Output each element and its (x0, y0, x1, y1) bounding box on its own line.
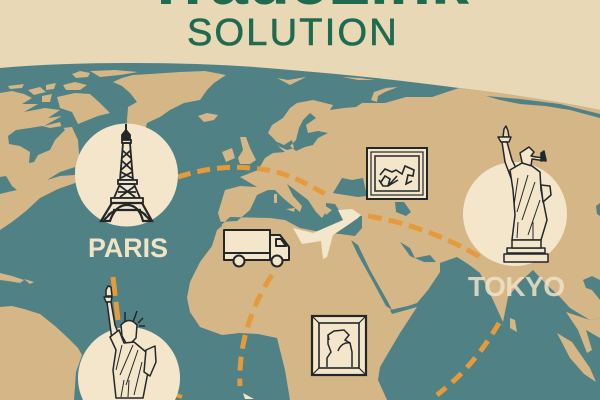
route: new york to paris (113, 277, 118, 320)
icon: plane fragment (243, 393, 254, 399)
icon: truck (224, 230, 289, 266)
label: tokyo: TOKYO (468, 271, 565, 302)
icon: eiffel tower (101, 124, 152, 221)
land: hudson bay cut-out (0, 126, 75, 194)
ocean: indian ocean (378, 257, 600, 400)
icon: statue of liberty, new york (104, 286, 156, 398)
label: paris: PARIS (88, 233, 168, 263)
circle: paris (75, 124, 178, 226)
icon: framed portrait (312, 316, 366, 375)
icon: statue of liberty, tokyo (498, 126, 551, 262)
land: svalbard (277, 77, 375, 85)
land: iceland (198, 113, 218, 122)
land: south america (0, 306, 82, 400)
land: sri lanka and sumatra (510, 312, 600, 382)
land: greenland (113, 71, 226, 130)
seas: mediterranean, black, caspian, red, gulf (216, 178, 436, 310)
seas: baltic (275, 113, 328, 151)
route: paris to tokyo (178, 167, 327, 195)
route: south-east (437, 323, 499, 395)
land: british isles (222, 137, 256, 164)
subtitle: SOLUTION (187, 12, 399, 54)
land: novaya zemlya (371, 87, 398, 102)
icon: framed map painting (367, 148, 427, 199)
land: eurasia and africa (187, 88, 600, 400)
icon: airplane (293, 209, 361, 259)
sea: northern strips (486, 96, 600, 300)
route: plane to tokyo (368, 216, 480, 257)
land: med islands (274, 194, 332, 215)
land: central america (0, 273, 34, 284)
circle: tokyo (463, 162, 567, 266)
route: new york stub (176, 395, 182, 397)
circle: new york (78, 327, 180, 400)
land: arctic islands (8, 70, 138, 124)
route: truck to south (240, 275, 272, 386)
land: north america (0, 91, 80, 230)
